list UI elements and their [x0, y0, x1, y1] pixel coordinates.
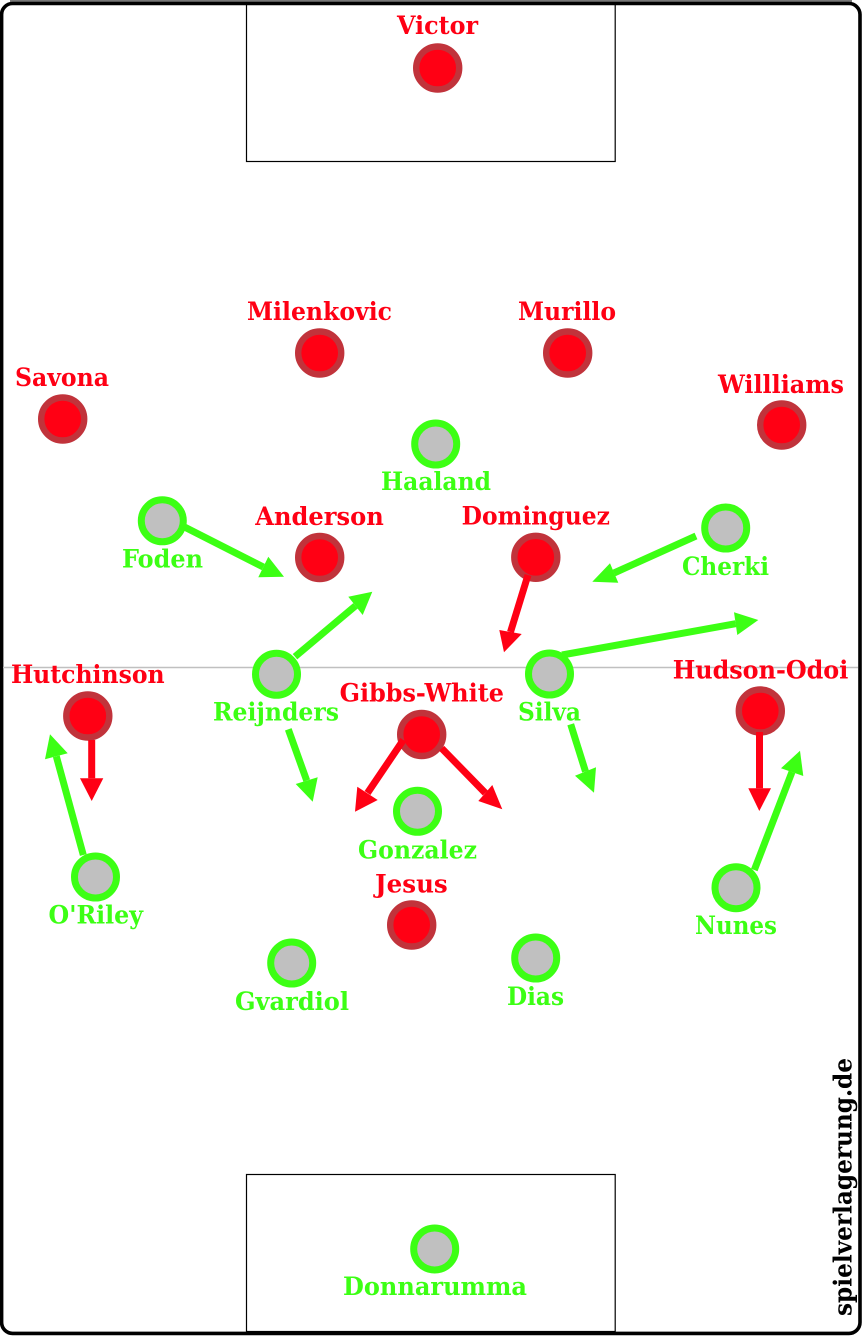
arrow: Reijnders forward [295, 592, 372, 657]
player: Willliams [717, 370, 844, 446]
player: Donnarumma [343, 1228, 527, 1301]
player: Jesus: Jesus [373, 869, 448, 898]
arrow: Reijnders back [288, 729, 318, 802]
arrow: Gibbs-White left [355, 740, 403, 812]
arrow: Dominguez [499, 575, 528, 652]
player: Victor [396, 11, 479, 90]
player: Gvardiol [235, 942, 349, 1016]
player: Gvardiol: Gvardiol [235, 987, 349, 1016]
player: Willliams: Willliams [717, 370, 844, 399]
player: Nunes [695, 867, 777, 940]
arrow: Foden run [185, 527, 284, 577]
player: Anderson [254, 502, 384, 579]
player: Dominguez [462, 502, 610, 579]
player: Milenkovic [247, 297, 392, 374]
player: Victor: Victor [396, 11, 479, 40]
player: Gonzalez [358, 790, 477, 864]
player: Haaland [381, 423, 491, 496]
player: Dias [507, 937, 564, 1011]
player: Nunes: Nunes [695, 911, 777, 940]
player: Foden: Foden [122, 544, 203, 573]
player: Gonzalez: Gonzalez [358, 835, 477, 864]
red movement arrows [80, 575, 771, 812]
green team players [49, 423, 777, 1301]
player: Reijnders: Reijnders [213, 698, 339, 727]
player: Dominguez: Dominguez [462, 502, 610, 530]
player: O'Riley: O'Riley [49, 900, 144, 930]
player: Gibbs-White [340, 679, 504, 756]
player: Haaland: Haaland [381, 467, 491, 496]
arrow: Nunes run [754, 751, 803, 870]
player: Hudson-Odoi: Hudson-Odoi [673, 655, 848, 684]
arrow: Gibbs-White right [442, 748, 502, 809]
arrow: Cherki run [592, 536, 696, 583]
player: Anderson: Anderson [254, 502, 384, 531]
arrow: O'Riley run [45, 734, 83, 855]
player: Milenkovic: Milenkovic [247, 297, 392, 326]
player: Cherki [682, 507, 769, 581]
player: Hutchinson [11, 660, 165, 738]
player: Murillo: Murillo [518, 297, 616, 326]
bottom penalty box [246, 1174, 615, 1332]
arrow: Silva back [571, 724, 596, 793]
player: Hudson-Odoi [673, 655, 848, 732]
arrow: Hudson-Odoi [748, 732, 771, 811]
red team players [11, 11, 848, 946]
player: Cherki: Cherki [682, 552, 769, 581]
player: Foden [122, 500, 203, 573]
player: Jesus [373, 869, 448, 946]
player: Hutchinson: Hutchinson [11, 660, 165, 689]
arrow: Silva wide [562, 612, 758, 655]
player: Donnarumma: Donnarumma [343, 1272, 527, 1301]
player: Savona [15, 363, 109, 440]
arrow: Hutchinson [80, 740, 103, 801]
player: Savona: Savona [15, 363, 109, 392]
player: Silva: Silva [518, 698, 581, 727]
halfway line [3, 666, 858, 668]
top penalty box [246, 4, 615, 162]
player: Gibbs-White: Gibbs-White [340, 679, 504, 708]
player: O'Riley [49, 856, 144, 930]
player: Reijnders [213, 653, 339, 727]
player: Dias: Dias [507, 982, 564, 1011]
player: Murillo [518, 297, 616, 374]
watermark: spielverlagerung.de [828, 1058, 858, 1316]
green movement arrows [45, 527, 803, 870]
player: Silva [518, 653, 581, 727]
